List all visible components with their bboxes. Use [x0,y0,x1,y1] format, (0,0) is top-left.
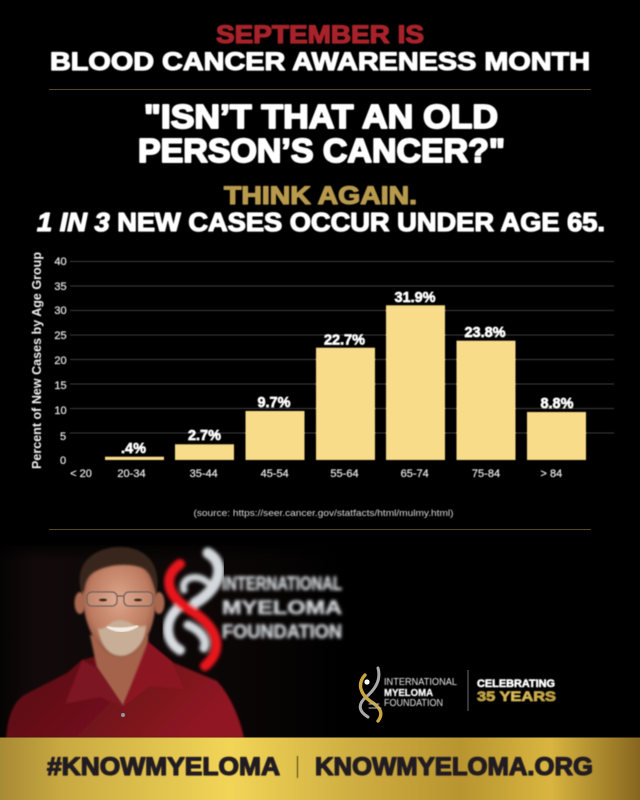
y axis ticks: 40 [54,256,67,268]
x axis age group labels: > 84 [541,468,562,480]
x axis age group labels: 55-64 [330,468,359,480]
heading: September is: SEPTEMBER IS [216,21,424,49]
y axis ticks: 0 [60,455,66,467]
header: awareness month [50,21,590,76]
x axis age group labels: < 20 [70,468,92,480]
wordmark: FOUNDATION [384,698,443,709]
blurred wall logo: INTERNATIONAL [222,574,342,595]
headline quote: "ISN’T THAT AN OLD [144,99,498,136]
face [82,558,156,657]
blurred wall logo [168,553,342,666]
subheading: think again: THINK AGAIN. [224,182,417,210]
bar value labels: 9.7% [257,395,291,411]
celebrating 35 years: CELEBRATING [477,678,555,690]
shirt [6,642,244,738]
bar value labels: 8.8% [540,396,574,412]
logo: International Myeloma Foundation [360,668,556,721]
wordmark [384,677,457,709]
y axis ticks: 5 [60,431,66,443]
neck [90,635,148,706]
y axis title: Percent of New Cases by Age Group [29,252,44,469]
y axis ticks [54,256,67,467]
celebrating 35 years [477,678,556,704]
beard [98,620,146,656]
subheading: think again [37,182,605,237]
wordmark: MYELOMA [384,688,433,699]
icon: DNA ribbon [360,668,381,721]
bar value labels: 23.8% [464,325,506,341]
x axis age group labels: 65-74 [401,468,429,480]
smile [107,626,138,631]
bar value labels: 22.7% [324,332,365,348]
y axis ticks: 30 [54,305,67,317]
bar value labels: 31.9% [394,290,436,306]
celebrating 35 years: 35 YEARS [477,688,556,704]
bar value labels: .4% [121,441,146,457]
y axis ticks: 25 [54,330,67,342]
x axis age group labels: 20-34 [117,468,146,480]
bar value labels [121,290,574,457]
x axis age group labels: 75-84 [472,468,500,480]
ears [74,592,86,614]
y axis ticks: 20 [54,355,67,367]
statistic statement: 1 IN 3 NEW CASES OCCUR UNDER AGE 65. [37,207,605,237]
heading: Blood Cancer Awareness Month: BLOOD CANCER AWARENESS MONTH [50,48,590,76]
headline quote [138,99,505,170]
hashtag: #KNOWMYELOMA [47,753,280,781]
bar chart: percent of new cases by age group [29,252,614,480]
bars [105,305,586,460]
x axis age group labels [70,468,562,480]
footer band [0,738,640,800]
y axis ticks: 35 [54,281,67,293]
source note: (source: https://seer.cancer.gov/statfacts/html/mulmy.html) [194,508,454,519]
y axis ticks: 10 [54,405,67,417]
shirt placket and button [118,710,125,738]
x axis age group labels: 35-44 [190,468,218,480]
y axis ticks: 15 [54,380,67,392]
hair [80,547,157,592]
photo: smiling man in red shirt before blurred logo [0,540,350,738]
collar [65,660,123,707]
blurred wall logo: FOUNDATION [222,622,342,643]
x axis age group labels: 45-54 [261,468,289,480]
blurred wall logo: MYELOMA [222,598,342,619]
bar value labels: 2.7% [188,428,221,444]
eyes [99,599,142,601]
headline quote: PERSON’S CANCER?" [138,133,505,170]
glasses [87,592,153,606]
man [6,547,244,738]
wordmark: INTERNATIONAL [384,677,457,688]
website: KNOWMYELOMA.ORG [315,753,593,781]
